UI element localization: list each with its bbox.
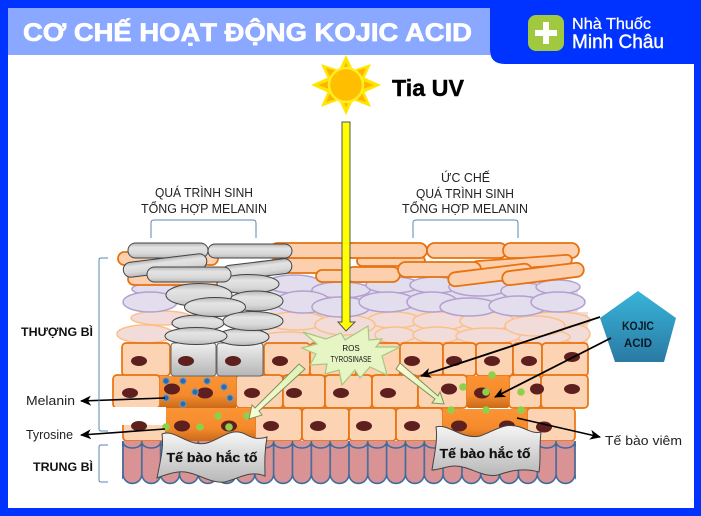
icon: sun (311, 55, 381, 115)
skin base fill (265, 284, 588, 344)
tyrosine dots (green) (162, 371, 525, 431)
icon: ROS tyrosinase star: TYROSINASE (330, 355, 372, 364)
arrow: inflammatory cell label (517, 418, 600, 437)
skin layer: epidermal cell row 1 (122, 343, 588, 376)
icon: ROS tyrosinase star: ROS (342, 344, 360, 353)
header tab: brand background (490, 0, 701, 64)
label: ức chế quá trình sinh tổng hợp melanin: QUÁ TRÌNH SINH (416, 186, 514, 201)
skin layer: purple cells (123, 275, 585, 317)
arrow: kojic acid to star arrow (421, 317, 600, 376)
logo: Nhà Thuốc Minh Châu (528, 15, 664, 53)
label: ức chế quá trình sinh tổng hợp melanin: TỔNG HỢP MELANIN (402, 201, 528, 216)
gray melanin cells (171, 343, 263, 376)
white patch (112, 407, 166, 425)
title: CƠ CHẾ HOẠT ĐỘNG KOJIC ACID (23, 17, 472, 47)
banner: tế bào hắc tố right (432, 425, 541, 475)
title (8, 8, 490, 55)
banner: tế bào hắc tố left (157, 432, 267, 482)
bracket: trung bì (99, 445, 108, 482)
banner: tế bào hắc tố right: Tế bào hắc tố (440, 446, 531, 461)
logo: Nhà Thuốc Minh Châu: Minh Châu (572, 32, 664, 53)
arrow: tyrosine label (81, 429, 165, 435)
icon: ROS tyrosinase star (302, 326, 400, 385)
logo: Nhà Thuốc Minh Châu: Nhà Thuốc (572, 16, 651, 33)
dermis layer (122, 441, 576, 485)
label: ức chế quá trình sinh tổng hợp melanin: ỨC CHẾ (441, 170, 490, 185)
melanin dots (blue) (163, 378, 233, 407)
label: quá trình sinh tổng hợp melanin: QUÁ TRÌNH SINH (155, 185, 253, 200)
skin layer: pink cells (117, 311, 590, 348)
label: Tia UV: Tia UV (392, 75, 465, 101)
gray melanin stack (122, 243, 293, 346)
icon: kojic acid pentagon: ACID (624, 338, 652, 350)
label: quá trình sinh tổng hợp melanin (141, 185, 267, 216)
icon: kojic acid pentagon (600, 291, 676, 362)
bracket: ức chế (413, 220, 518, 238)
label: Trung bì: TRUNG BÌ (33, 459, 93, 474)
skin layer: orange horned cells (118, 243, 585, 287)
bracket: quá trình sinh (151, 220, 256, 238)
arrow: kojic acid to melanocyte (495, 338, 611, 397)
label: Melanin: Melanin (26, 393, 75, 408)
label: Thượng bì: THƯỢNG BÌ (21, 324, 93, 339)
banner: tế bào hắc tố left: Tế bào hắc tố (166, 450, 258, 465)
skin layer: epidermal cell row 3 (123, 408, 575, 441)
icon: kojic acid pentagon: KOJIC (622, 321, 654, 333)
label: ức chế quá trình sinh tổng hợp melanin (402, 170, 528, 216)
arrow: UV ray (338, 122, 355, 331)
melanocyte cells (orange) (160, 376, 527, 441)
label: Tyrosine: Tyrosine (26, 427, 73, 442)
arrow: star to right melanocyte (396, 363, 444, 404)
arrow: melanin label (81, 398, 165, 401)
arrow: star to left melanocyte (249, 364, 305, 419)
skin layer: epidermal cell row 2 (113, 375, 588, 408)
label: quá trình sinh tổng hợp melanin: TỔNG HỢP MELANIN (141, 201, 267, 216)
nuclei (122, 352, 580, 432)
label: Tế bào viêm: Tế bào viêm (605, 433, 682, 448)
bracket: thượng bì (99, 258, 108, 431)
